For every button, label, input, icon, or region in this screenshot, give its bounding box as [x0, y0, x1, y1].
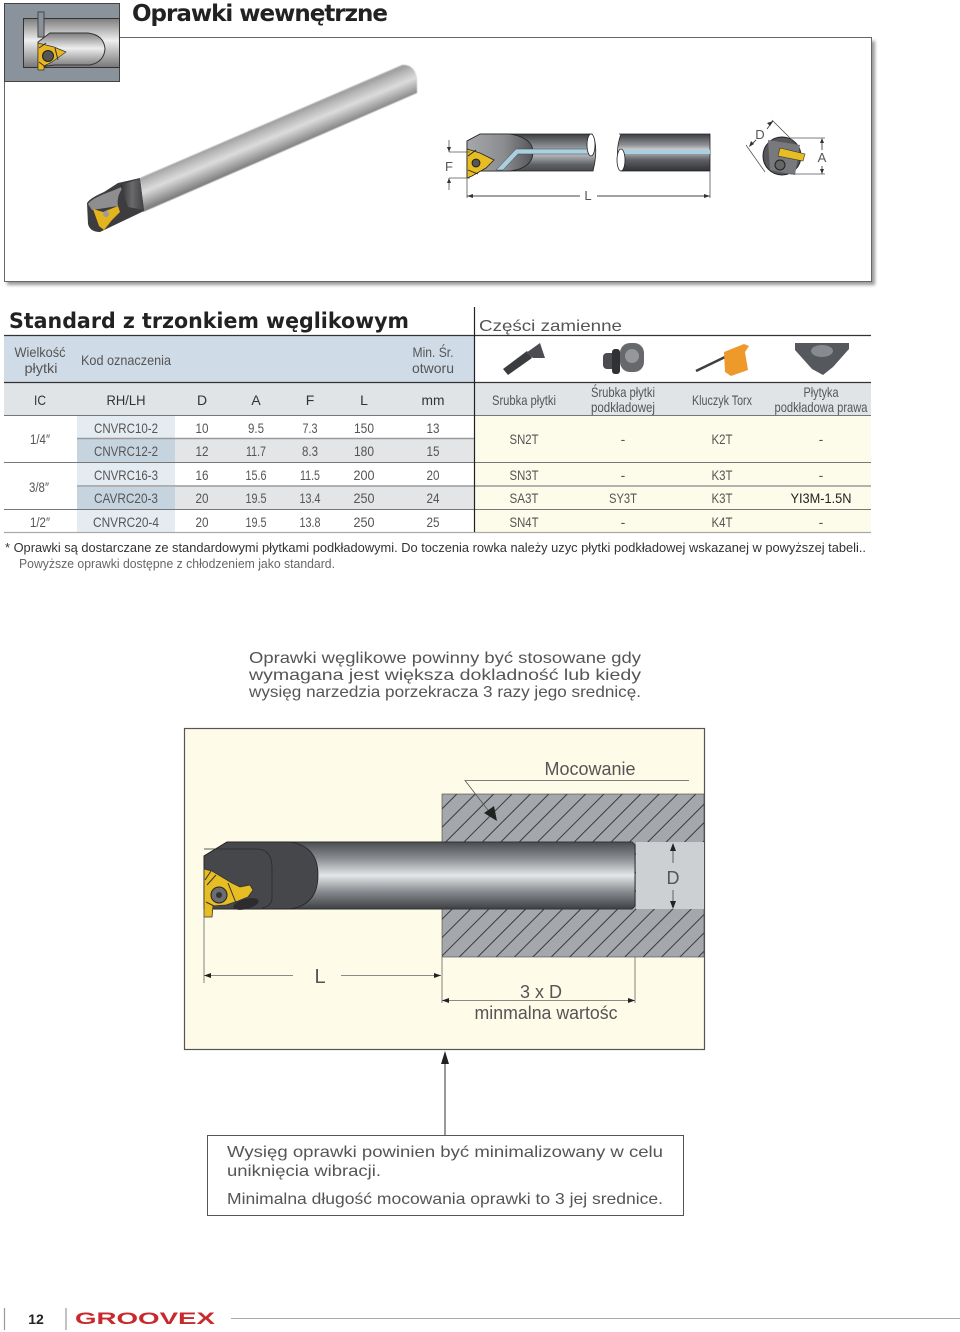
row CNVRC10-2: 9.5 [248, 420, 264, 436]
spare parts row 4 [510, 514, 824, 530]
spare parts row 4: K4T [712, 514, 733, 530]
row CNVRC12-2: 8.3 [302, 443, 318, 459]
logo: GROOVEX: GROOVEX [75, 1309, 216, 1328]
dimension: 3 x D minimum: minmalna wartośc [474, 1003, 618, 1023]
row CNVRC20-4 [93, 514, 440, 530]
table header: units: A [251, 392, 261, 408]
text block: carbide usage note: Oprawki węglikowe powinny być stosowane gdy [249, 650, 641, 667]
icon: insert screw [503, 343, 545, 375]
table header: units: D [197, 392, 207, 408]
spare parts row 2: - [819, 467, 824, 483]
spare parts row 2 [510, 467, 824, 483]
row CAVRC20-3: CAVRC20-3 [94, 490, 158, 506]
spare parts column headers: Srubka płytki [492, 392, 556, 408]
row CAVRC20-3: 24 [426, 490, 440, 506]
row CAVRC20-3: 20 [196, 490, 209, 506]
icon: torx key [696, 344, 749, 376]
spare parts row 3: SY3T [609, 490, 637, 506]
row CNVRC12-2 [94, 443, 440, 459]
spare parts column headers: Płytyka [804, 384, 839, 400]
icon: internal turning thumbnail [4, 4, 120, 82]
dimension: 3 x D minimum: 3 x D [520, 982, 562, 1002]
row CNVRC16-3: 20 [426, 467, 440, 483]
label: clamping with leader [465, 759, 689, 821]
spare parts column headers: podkładowej [591, 399, 655, 415]
spare parts row 3: YI3M-1.5N [790, 490, 852, 506]
row CNVRC12-2: 12 [196, 443, 209, 459]
row CNVRC16-3: CNVRC16-3 [94, 467, 158, 483]
spare parts row 1: K2T [712, 431, 733, 447]
row CNVRC16-3: 15.6 [246, 467, 267, 483]
row CNVRC12-2: CNVRC12-2 [94, 443, 158, 459]
table header: units: L [360, 392, 368, 408]
row CNVRC12-2: 11.7 [246, 443, 266, 459]
table header: units: mm [422, 392, 444, 408]
table header: column descriptions: Kod oznaczenia [81, 352, 171, 368]
table header: units: IC [34, 392, 46, 408]
spare parts row 2: K3T [712, 467, 733, 483]
spare parts column headers: podkładowa prawa [774, 399, 868, 415]
table body: insert sizes [29, 431, 50, 530]
diagram: cross section with D and A dimensions [746, 120, 827, 175]
row CNVRC20-4: 250 [354, 514, 375, 530]
illustration: carbide boring bar [87, 65, 417, 232]
table header: column descriptions [14, 343, 454, 376]
row CNVRC10-2: 150 [354, 420, 374, 436]
row CNVRC16-3: 11.5 [300, 467, 320, 483]
diagram: cross section with D and A dimensions: A [818, 150, 827, 165]
footnote: * Oprawki są dostarczane ze standardowymi płytkami podkładowymi. Do toczenia rowka należy uzyc płytki podkładowej wskazanej w powyższej tabeli.. [5, 540, 866, 555]
diagram: cross section with D and A dimensions: D [755, 127, 765, 142]
row CNVRC10-2 [94, 420, 440, 436]
table header: column descriptions: Min. Śr. [412, 343, 454, 360]
spare parts column headers [492, 383, 868, 415]
table header: column descriptions: otworu [412, 360, 454, 376]
spare parts row 1 [510, 431, 824, 447]
table header: column descriptions: płytki [24, 360, 58, 376]
callout: overhang note: uniknięcia wibracji. [227, 1163, 381, 1180]
clamp block hatched [442, 794, 704, 957]
row CNVRC20-4: 19.5 [246, 514, 267, 530]
footnote [5, 540, 866, 571]
row CNVRC20-4: CNVRC20-4 [93, 514, 159, 530]
diagram: side view with F and L dimensions: F [445, 159, 453, 174]
heading: standard with carbide shank: Standard z trzonkiem węglikowym [9, 309, 409, 333]
dimension: L: L [314, 966, 326, 988]
heading: spare parts: Części zamienne [479, 318, 622, 335]
callout: overhang note: Wysięg oprawki powinien być minimalizowany w celu [227, 1144, 663, 1161]
table: spare parts [475, 343, 871, 532]
row CNVRC10-2: 10 [196, 420, 209, 436]
row CNVRC12-2: 15 [426, 443, 440, 459]
spare parts row 4: - [819, 514, 824, 530]
callout: overhang note [208, 1136, 684, 1216]
title: Oprawki wewnętrzne [132, 1, 388, 27]
icon: shim plate [795, 343, 849, 375]
row CAVRC20-3: 13.4 [300, 490, 321, 506]
spare parts column headers: Śrubka płytki [591, 383, 655, 400]
spare parts row 2: - [621, 467, 626, 483]
dimension: D: D [666, 868, 680, 888]
spare parts column headers: Kluczyk Torx [692, 392, 752, 408]
boring bar [204, 842, 635, 917]
table header: units: F [306, 392, 314, 408]
page number: 12 [28, 1311, 44, 1327]
row CNVRC20-4: 25 [426, 514, 440, 530]
text block: carbide usage note: wysięg narzedzia porzekracza 3 razy jego srednicę. [248, 684, 641, 701]
table header: units: RH/LH [106, 392, 146, 408]
spare parts row 1: - [819, 431, 824, 447]
spare parts row 4: - [621, 514, 626, 530]
panel: product images [4, 38, 875, 285]
row CNVRC12-2: 180 [354, 443, 374, 459]
table body: insert sizes: 3/8″ [29, 479, 49, 495]
diagram: side view with F and L dimensions: L [584, 188, 592, 203]
spare parts row 4: SN4T [510, 514, 539, 530]
spare parts row 3: SA3T [510, 490, 539, 506]
row CAVRC20-3 [94, 490, 440, 506]
spare parts row 1: SN2T [510, 431, 539, 447]
spare parts row 3: K3T [712, 490, 733, 506]
footnote: Powyższe oprawki dostępne z chłodzeniem jako standard. [19, 556, 335, 571]
table body: insert sizes: 1/2″ [30, 514, 50, 530]
row CNVRC16-3: 200 [354, 467, 375, 483]
row CAVRC20-3: 19.5 [246, 490, 267, 506]
table: tool specifications [4, 336, 475, 532]
row CNVRC20-4: 20 [196, 514, 209, 530]
row CNVRC20-4: 13.8 [300, 514, 321, 530]
text block: carbide usage note [248, 650, 641, 701]
diagram: side view with F and L dimensions [445, 134, 710, 203]
arrow: up to clamping diagram [441, 1051, 449, 1135]
footer [4, 1308, 960, 1330]
callout: overhang note: Minimalna długość mocowania oprawki to 3 jej srednice. [227, 1191, 663, 1208]
panel: clamping diagram [184, 728, 704, 1050]
spare parts row 3 [510, 490, 852, 506]
dimension: D [666, 843, 680, 909]
icon: shim screw [603, 343, 644, 374]
dimension: L [204, 909, 442, 1003]
dimension: 3 x D minimum [442, 957, 635, 1023]
row CAVRC20-3: 250 [354, 490, 375, 506]
text block: carbide usage note: wymagana jest większa dokladność lub kiedy [248, 667, 641, 684]
row CNVRC16-3 [94, 467, 440, 483]
row CNVRC10-2: CNVRC10-2 [94, 420, 158, 436]
table header: units [34, 392, 444, 408]
row CNVRC10-2: 13 [426, 420, 440, 436]
spare parts row 2: SN3T [510, 467, 539, 483]
table body: insert sizes: 1/4″ [30, 431, 50, 447]
spare parts row 1: - [621, 431, 626, 447]
row CNVRC16-3: 16 [196, 467, 209, 483]
table header: column descriptions: Wielkość [14, 344, 66, 360]
label: clamping with leader: Mocowanie [544, 759, 636, 779]
row CNVRC10-2: 7.3 [302, 420, 318, 436]
